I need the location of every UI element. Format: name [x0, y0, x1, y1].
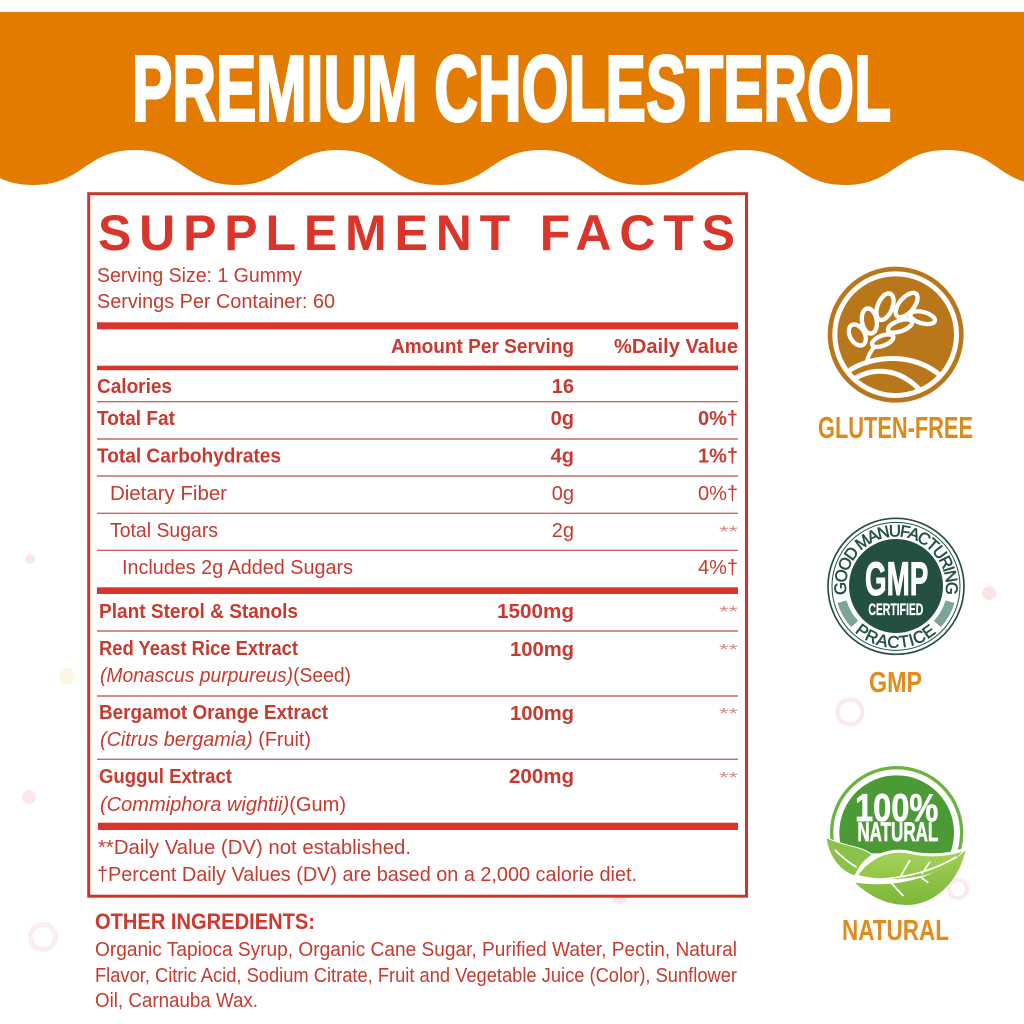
row: total sugars	[110, 520, 738, 542]
row: total carbohydrates: Total Carbohydrates	[97, 446, 281, 468]
row: guggul extract: Guggul Extract	[99, 766, 232, 788]
row: guggul extract: 200mg	[509, 766, 574, 788]
other ingredients: Flavor, Citric Acid, Sodium Citrate, Fruit and Vegetable Juice (Color), Sunflower	[95, 965, 737, 987]
row: total fat	[97, 408, 738, 430]
serving information: Serving Size: 1 Gummy	[97, 265, 302, 287]
footnotes: †Percent Daily Values (DV) are based on a 2,000 calorie diet.	[97, 864, 637, 886]
background confetti dots	[22, 554, 996, 950]
icon: gluten-free wheat badge	[828, 267, 964, 403]
row: dietary fiber: 0g	[552, 483, 574, 505]
row: total carbohydrates: 4g	[551, 446, 574, 468]
row: bergamot orange extract: **	[719, 706, 738, 723]
row: total carbohydrates: 1%†	[698, 446, 738, 468]
other ingredients: Oil, Carnauba Wax.	[95, 990, 258, 1012]
row: total sugars: Total Sugars	[110, 520, 218, 542]
row: guggul extract: (Commiphora wightii)(Gum)	[100, 794, 346, 816]
header banner with wavy edge	[0, 12, 1024, 185]
row: dietary fiber: 0%†	[698, 483, 738, 505]
row: calories: 16	[552, 376, 574, 398]
row: total sugars: 2g	[552, 520, 574, 542]
panel: supplement facts	[89, 194, 746, 896]
row: red yeast rice extract	[99, 638, 738, 687]
row: guggul extract: **	[719, 770, 738, 787]
row: bergamot orange extract: (Citrus bergamia) (Fruit)	[100, 729, 311, 751]
row: added sugars	[122, 557, 738, 579]
row: calories	[97, 376, 574, 398]
row: plant sterol and stanols: **	[719, 604, 738, 621]
row: total carbohydrates	[97, 446, 738, 468]
row: plant sterol and stanols: 1500mg	[497, 601, 574, 623]
row: added sugars: Includes 2g Added Sugars	[122, 557, 353, 579]
other ingredients: OTHER INGREDIENTS:	[95, 909, 315, 934]
footnotes: **Daily Value (DV) not established.	[98, 837, 411, 859]
other ingredients	[95, 909, 737, 1012]
row: total sugars: **	[719, 524, 738, 541]
row: added sugars: 4%†	[698, 557, 738, 579]
row: red yeast rice extract: 100mg	[510, 639, 574, 661]
serving information: Servings Per Container: 60	[97, 291, 335, 313]
row: bergamot orange extract	[99, 702, 738, 751]
heading: supplement facts: SUPPLEMENT FACTS	[98, 205, 735, 261]
icon: gmp certified badge: PRACTICE	[855, 623, 936, 648]
icon: 100% natural leaf badge: 100%	[855, 787, 938, 830]
column headers: %Daily Value	[614, 336, 738, 358]
serving information	[97, 265, 335, 313]
row: red yeast rice extract: (Monascus purpureus)(Seed)	[100, 665, 351, 687]
icon: 100% natural leaf badge	[826, 768, 967, 905]
row: red yeast rice extract: **	[719, 642, 738, 659]
column headers	[391, 336, 738, 358]
row: guggul extract	[99, 766, 738, 816]
icon: gmp certified badge: GOOD MANUFACTURING	[834, 524, 958, 594]
other ingredients: Organic Tapioca Syrup, Organic Cane Sugar, Purified Water, Pectin, Natural	[95, 939, 737, 961]
footnotes	[97, 837, 637, 886]
row: bergamot orange extract: Bergamot Orange Extract	[99, 702, 328, 724]
row: total fat: Total Fat	[97, 408, 175, 430]
icon: gmp certified badge: GMP	[865, 553, 928, 606]
row: plant sterol and stanols	[99, 601, 738, 623]
column headers: Amount Per Serving	[391, 336, 574, 358]
label: natural: NATURAL	[842, 915, 949, 947]
row: plant sterol and stanols: Plant Sterol & Stanols	[99, 601, 298, 623]
row: total fat: 0%†	[698, 408, 738, 430]
row: red yeast rice extract: Red Yeast Rice Extract	[99, 638, 298, 660]
label: gmp: GMP	[869, 667, 922, 699]
row: calories: Calories	[97, 376, 172, 398]
icon: 100% natural leaf badge: NATURAL	[857, 817, 938, 847]
row: total fat: 0g	[551, 408, 574, 430]
icon: gmp certified badge	[827, 518, 965, 656]
row: dietary fiber	[110, 483, 738, 505]
row: bergamot orange extract: 100mg	[510, 703, 574, 725]
icon: gmp certified badge: CERTIFIED	[868, 600, 923, 619]
row: dietary fiber: Dietary Fiber	[110, 483, 227, 505]
